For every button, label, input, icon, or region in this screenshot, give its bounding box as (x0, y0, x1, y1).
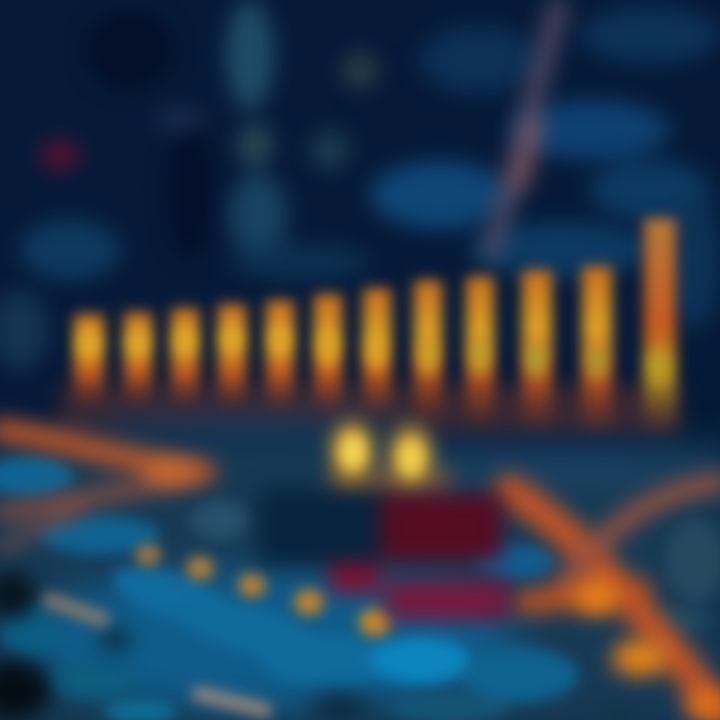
bar chart: glowing columns (60, 218, 680, 435)
city blocks: blue clusters (0, 456, 720, 720)
column glow underlay (60, 385, 680, 435)
upper haze and skyline (0, 0, 720, 440)
road hot spots (142, 462, 720, 719)
lower ground: blue base (0, 416, 720, 720)
diagonal light beam (480, 0, 572, 260)
pale building strips (42, 591, 273, 718)
bars (74, 218, 676, 432)
orange roads (0, 430, 720, 712)
dark corners (0, 571, 650, 720)
twin glowing lights (332, 422, 431, 482)
bar highlights (78, 323, 670, 380)
central platform (258, 470, 510, 620)
row of glowing dots (135, 544, 391, 636)
